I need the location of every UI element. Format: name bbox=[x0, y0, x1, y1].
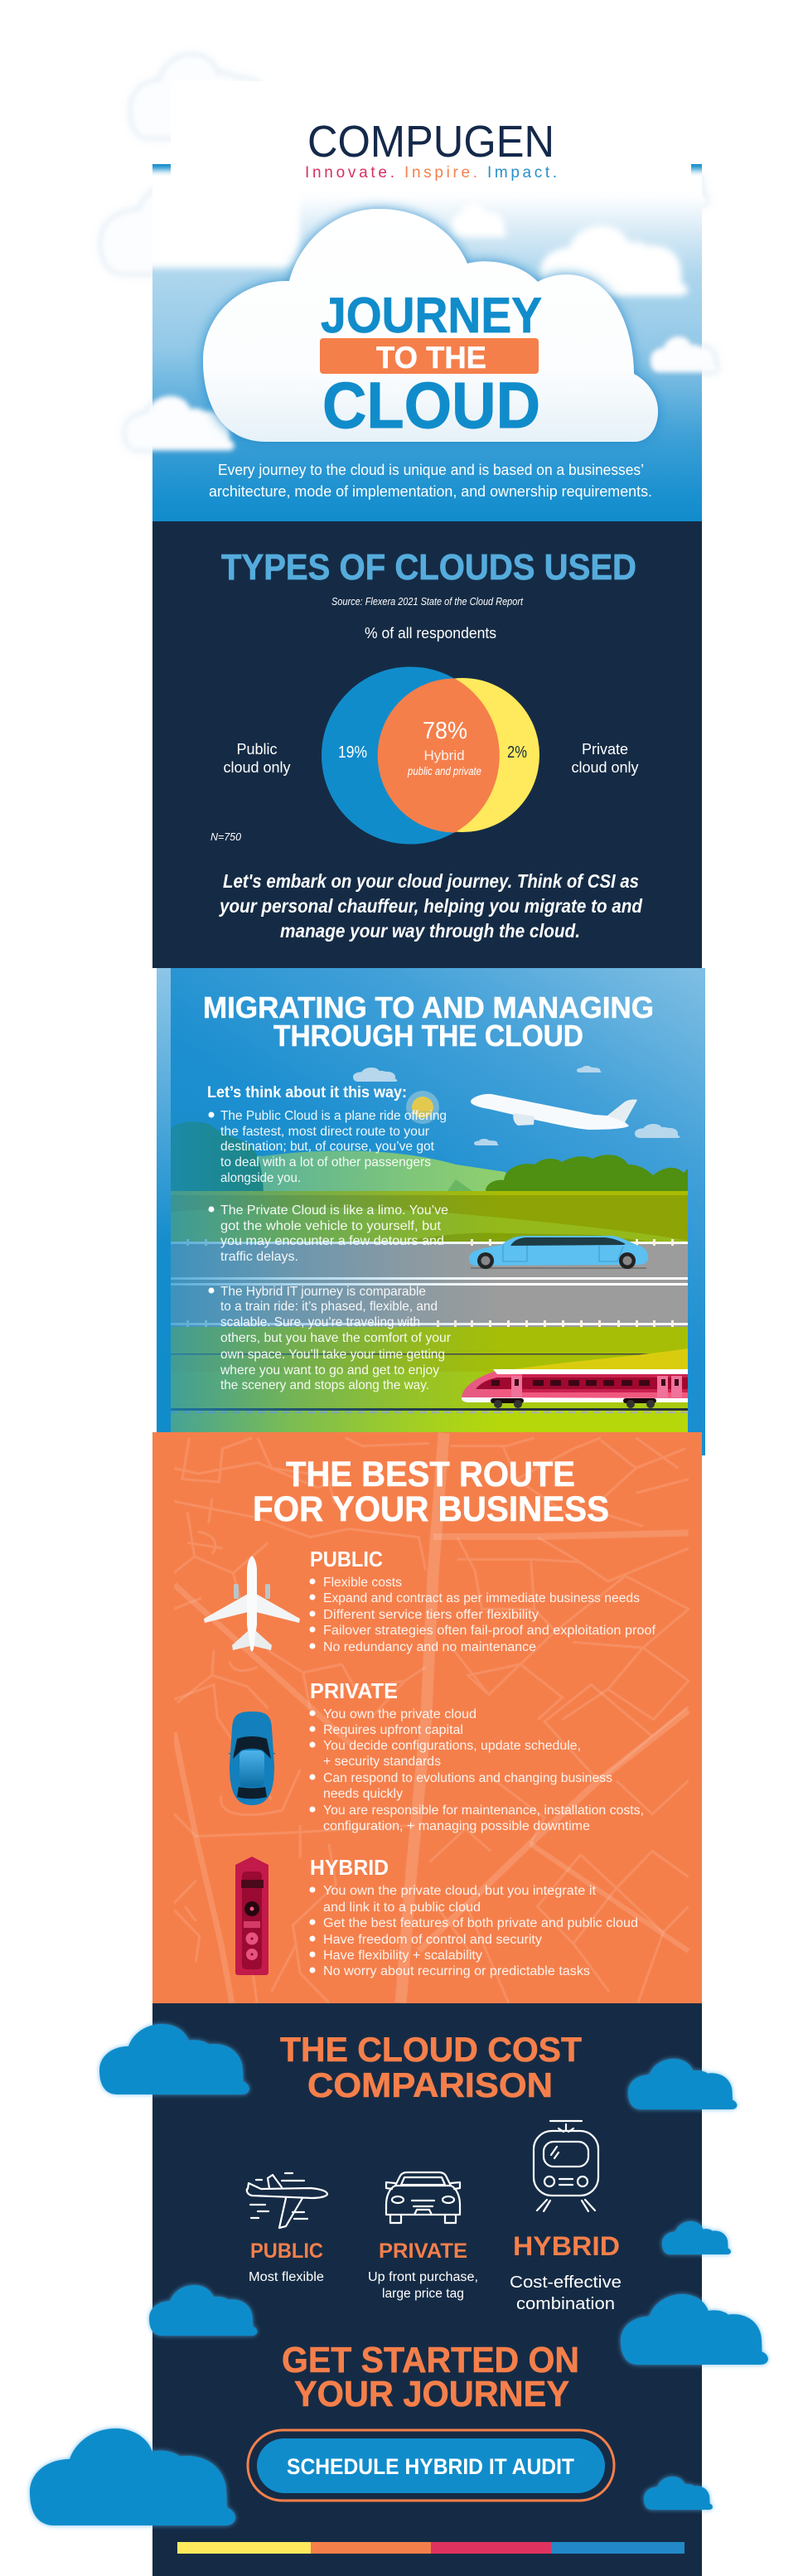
heading: THE BEST ROUTE bbox=[286, 1455, 575, 1494]
venn diagram bbox=[322, 666, 539, 844]
background white clouds bbox=[125, 203, 718, 450]
list: hybrid: Get the best features of both private and public cloud bbox=[323, 1916, 638, 1930]
heading: FOR YOUR BUSINESS bbox=[253, 1489, 609, 1529]
text: private cloud: traffic delays. bbox=[220, 1250, 298, 1264]
list: private: You decide configurations, update schedule, bbox=[323, 1739, 581, 1753]
label: public bbox=[223, 741, 291, 776]
label: public cost: Most flexible bbox=[249, 2270, 324, 2284]
callout: manage your way through the cloud. bbox=[280, 920, 580, 942]
heading: THROUGH THE CLOUD bbox=[273, 1019, 583, 1053]
logo: COMPUGEN bbox=[307, 117, 554, 167]
list: public: Expand and contract as per immediate business needs bbox=[323, 1591, 640, 1605]
panel: best route bbox=[152, 1432, 702, 2003]
heading: get started: GET STARTED ON bbox=[282, 2340, 579, 2380]
heading bbox=[253, 1455, 609, 1529]
clouds behind header bbox=[101, 55, 708, 274]
heading: MIGRATING TO AND MANAGING bbox=[203, 990, 654, 1024]
map background bbox=[171, 1433, 689, 2002]
list: hybrid: HYBRID bbox=[310, 1855, 389, 1880]
text: private cloud: got the whole vehicle to yourself, but bbox=[220, 1219, 442, 1233]
label: private: Private bbox=[582, 741, 628, 758]
title: TO THE bbox=[376, 341, 486, 375]
list: hybrid: Have freedom of control and security bbox=[323, 1933, 542, 1947]
text: public cloud: destination; but, of course, you’ve got bbox=[220, 1140, 435, 1154]
label: private cost: PRIVATE bbox=[379, 2239, 467, 2263]
text: public cloud: The Public Cloud is a plane ride offering bbox=[220, 1109, 447, 1123]
text: hybrid: own space. You’ll take your time getting bbox=[220, 1348, 445, 1362]
heading: get started: YOUR JOURNEY bbox=[294, 2374, 569, 2414]
text: hybrid: others, but you have the comfort of your bbox=[220, 1331, 452, 1345]
list: public: Failover strategies often fail-proof and exploitation proof bbox=[323, 1624, 656, 1638]
label: hybrid cost: combination bbox=[516, 2295, 615, 2313]
logo: Impact. bbox=[487, 164, 557, 182]
text: private cloud bbox=[209, 1203, 448, 1264]
intro text: architecture, mode of implementation, and ownership requirements. bbox=[209, 483, 652, 500]
heading: get started bbox=[282, 2340, 579, 2414]
list: public bbox=[310, 1547, 656, 1654]
list: private: Requires upfront capital bbox=[323, 1723, 463, 1737]
illustration: landscape scene bbox=[171, 1066, 688, 1433]
icon: car outline bbox=[386, 2172, 460, 2223]
label: private cost: large price tag bbox=[382, 2287, 464, 2301]
text: private cloud: you may encounter a few detours and bbox=[220, 1234, 444, 1248]
title bbox=[320, 288, 542, 442]
icon: train outline bbox=[534, 2121, 598, 2211]
list: hybrid: You own the private cloud, but you integrate it bbox=[323, 1884, 597, 1898]
list: private: PRIVATE bbox=[310, 1678, 398, 1703]
heading bbox=[280, 2030, 582, 2104]
venn diagram: public and private bbox=[407, 765, 481, 777]
label: public: cloud only bbox=[223, 759, 291, 776]
white fog left bbox=[124, 170, 709, 268]
title cloud bbox=[203, 209, 658, 442]
venn diagram: Hybrid bbox=[423, 748, 465, 763]
list: public: Different service tiers offer flexibility bbox=[323, 1608, 539, 1622]
list: public: Flexible costs bbox=[323, 1576, 402, 1590]
venn diagram: 78% bbox=[423, 718, 467, 744]
title: JOURNEY bbox=[321, 288, 542, 343]
airplane bbox=[471, 1094, 637, 1130]
label: private bbox=[571, 741, 639, 776]
label: public cost bbox=[249, 2239, 324, 2284]
sun bbox=[406, 1091, 439, 1124]
text: hybrid: where you want to go and get to enjoy bbox=[220, 1363, 439, 1378]
button: SCHEDULE HYBRID IT AUDIT bbox=[287, 2454, 574, 2479]
callout: your personal chauffeur, helping you migrate to and bbox=[219, 895, 643, 917]
text: hybrid: The Hybrid IT journey is comparable bbox=[220, 1285, 426, 1299]
color bar bbox=[177, 2542, 684, 2554]
text: hybrid: the scenery and stops along the way. bbox=[220, 1378, 429, 1392]
intro text: Every journey to the cloud is unique and is based on a businesses’ bbox=[218, 462, 644, 478]
list: public: No redundancy and no maintenance bbox=[323, 1640, 536, 1654]
panel: migrating bbox=[157, 968, 705, 1455]
label: public cost: PUBLIC bbox=[250, 2239, 323, 2263]
sky clouds bbox=[353, 1066, 680, 1145]
title: CLOUD bbox=[322, 368, 540, 442]
list: private: configuration, + managing possible downtime bbox=[323, 1819, 590, 1833]
left fade overlay bbox=[171, 1111, 502, 1433]
text: hybrid: scalable. Sure, you’re traveling with bbox=[220, 1315, 420, 1329]
label: hybrid cost: Cost-effective bbox=[510, 2273, 622, 2292]
list: hybrid: and link it to a public cloud bbox=[323, 1901, 481, 1915]
list: hybrid: Have flexibility + scalability bbox=[323, 1949, 482, 1963]
heading: TYPES OF CLOUDS USED bbox=[221, 547, 636, 588]
hills bbox=[171, 1121, 688, 1243]
decorative blue clouds bbox=[30, 2024, 768, 2525]
label: private cost bbox=[368, 2239, 478, 2301]
text: private cloud: The Private Cloud is like a limo. You’ve bbox=[220, 1203, 448, 1218]
logo: Inspire. bbox=[404, 164, 477, 182]
list: private bbox=[310, 1678, 644, 1833]
fields bbox=[171, 1327, 688, 1433]
text: hybrid: to a train ride: it’s phased, flexible, and bbox=[220, 1300, 438, 1314]
panel: header sky bbox=[124, 81, 718, 521]
callout: Let's embark on your cloud journey. Think of CSI as bbox=[223, 870, 639, 892]
label: hybrid cost bbox=[510, 2231, 622, 2313]
button bbox=[248, 2430, 614, 2501]
venn diagram: 19% bbox=[338, 743, 367, 762]
text: public cloud: alongside you. bbox=[220, 1171, 301, 1185]
text: public cloud: the fastest, most direct route to your bbox=[220, 1125, 430, 1139]
text: public cloud: to deal with a lot of other passengers bbox=[220, 1155, 431, 1169]
train bbox=[171, 1369, 688, 1412]
panel: types of clouds bbox=[152, 521, 702, 968]
heading: THE CLOUD COST bbox=[280, 2030, 582, 2069]
venn diagram: 2% bbox=[507, 743, 527, 762]
list: private: You are responsible for maintenance, installation costs, bbox=[323, 1804, 644, 1818]
label: public: Public bbox=[236, 741, 278, 758]
subheading: Let’s think about it this way: bbox=[207, 1084, 407, 1102]
chart subtitle: % of all respondents bbox=[365, 625, 496, 642]
list: hybrid bbox=[310, 1855, 638, 1978]
list: private: Can respond to evolutions and changing business bbox=[323, 1771, 612, 1785]
list: public: PUBLIC bbox=[310, 1547, 383, 1571]
heading bbox=[203, 990, 654, 1053]
panel: cost comparison bbox=[30, 2003, 768, 2576]
limousine bbox=[469, 1236, 648, 1269]
label: private: cloud only bbox=[571, 759, 639, 776]
list: private: You own the private cloud bbox=[323, 1707, 476, 1721]
intro text bbox=[209, 462, 652, 500]
text: public cloud bbox=[209, 1109, 447, 1185]
label: hybrid cost: HYBRID bbox=[513, 2231, 620, 2261]
callout bbox=[219, 870, 643, 942]
road bbox=[171, 1239, 688, 1327]
icon: car top view bbox=[228, 1712, 276, 1805]
label: private cost: Up front purchase, bbox=[368, 2270, 478, 2284]
icon: airplane top view bbox=[204, 1556, 300, 1652]
source: Source: Flexera 2021 State of the Cloud Report bbox=[331, 596, 523, 608]
sample size: N=750 bbox=[210, 830, 242, 843]
list: private: needs quickly bbox=[323, 1787, 403, 1801]
icon: plane outline bbox=[247, 2173, 327, 2228]
list: hybrid: No worry about recurring or predictable tasks bbox=[323, 1964, 590, 1978]
list: private: + security standards bbox=[323, 1755, 441, 1769]
logo: Innovate. bbox=[305, 164, 394, 182]
heading: COMPARISON bbox=[307, 2065, 553, 2104]
text: hybrid bbox=[209, 1285, 452, 1392]
icon: train top view bbox=[235, 1857, 268, 1975]
